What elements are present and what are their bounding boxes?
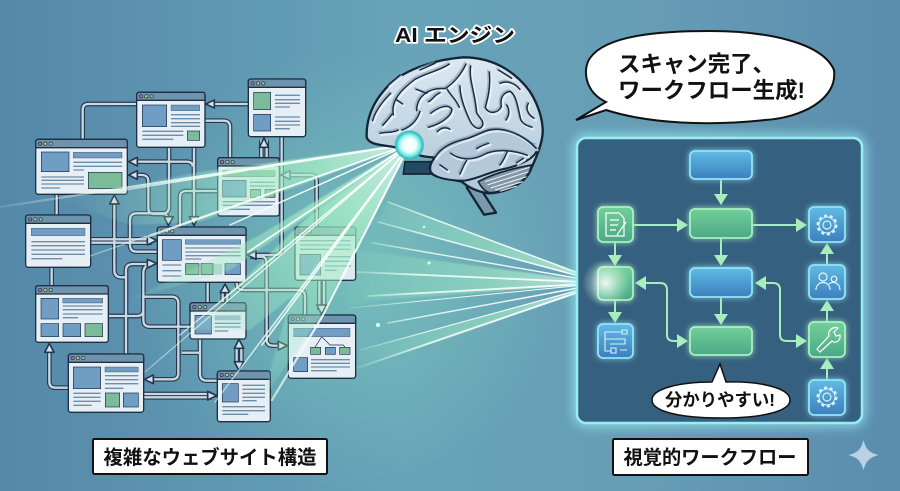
callout: easy to understand (652, 364, 790, 418)
flow arrows (608, 179, 834, 380)
window: lower centre (190, 303, 246, 339)
icon: wrench (809, 322, 845, 357)
window: right (295, 227, 356, 280)
label: complex website structure (93, 439, 327, 474)
window: upper left (36, 139, 127, 194)
flow box: green hub (598, 267, 633, 300)
window: top right (248, 79, 306, 137)
flow box: lower green (690, 327, 752, 355)
icon: gear top (809, 207, 845, 242)
connector arrows (45, 100, 327, 400)
light beams from brain to website network (0, 144, 410, 402)
light beams from workflow to network (345, 202, 605, 368)
speech bubble: scan complete: スキャン完了、 (618, 52, 775, 77)
panel: visual workflow (577, 138, 862, 423)
flow box: upper green (690, 209, 752, 238)
window: top centre (137, 92, 205, 147)
speech bubble: scan complete (576, 31, 834, 123)
window: lower left (36, 286, 108, 342)
icon: gear bottom (809, 380, 845, 415)
beam glow on hub (582, 259, 630, 307)
window: central hub (157, 227, 246, 282)
title: AI engine: AI エンジン (395, 25, 515, 47)
label: visual workflow: 視覚的ワークフロー (624, 447, 796, 469)
icon: flow diagram (598, 324, 633, 358)
icon: sparkle (848, 440, 879, 470)
label: visual workflow (613, 439, 808, 475)
window: flowchart page (288, 315, 356, 378)
speech bubble: scan complete: ワークフロー生成! (618, 78, 805, 103)
website network panel (26, 79, 356, 422)
window: upper middle right (218, 158, 279, 216)
flow box: top blue (690, 151, 752, 179)
window: bottom centre (217, 371, 270, 422)
callout: easy to understand: 分かりやすい! (665, 390, 775, 410)
label: complex website structure: 複雑なウェブサイト構造 (104, 446, 317, 469)
window: bottom left (68, 354, 144, 412)
icon: brain (367, 57, 543, 215)
icon: people (809, 265, 845, 299)
icon: document (598, 207, 633, 242)
flow box: middle blue (690, 268, 752, 297)
window: left (26, 215, 91, 267)
